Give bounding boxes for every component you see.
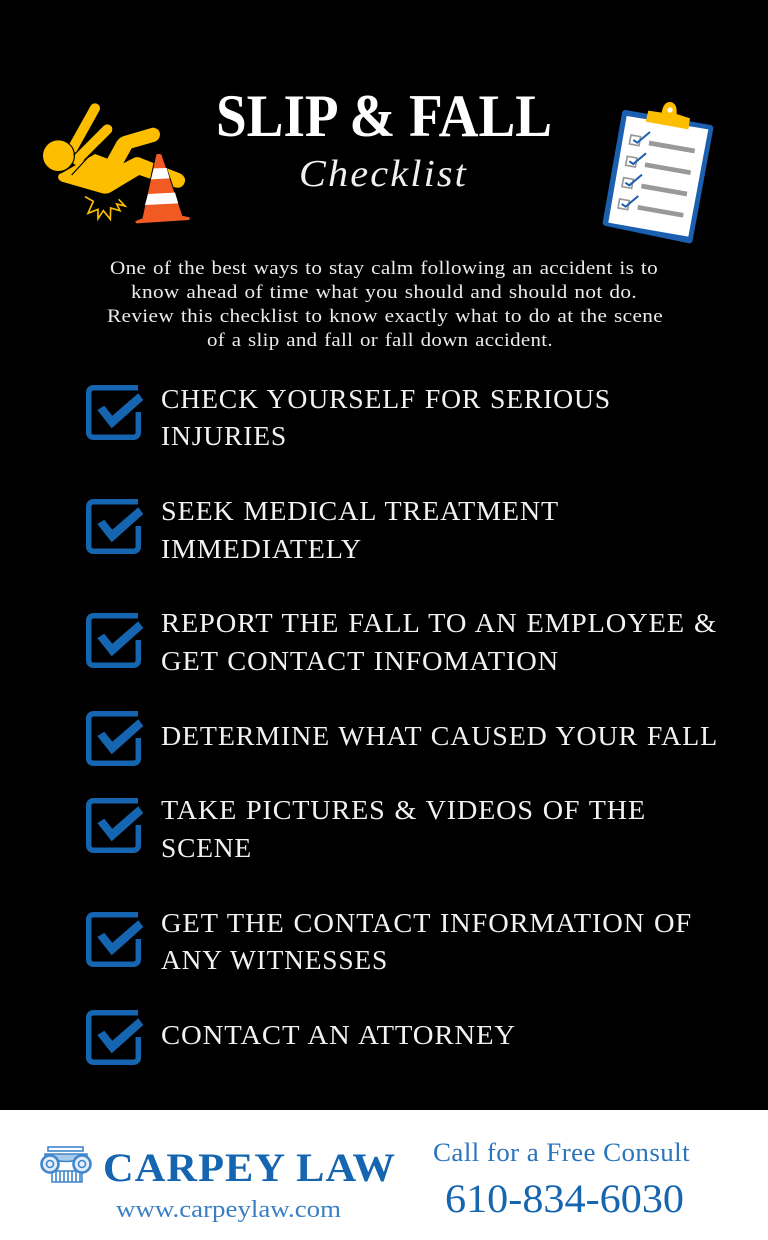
checklist item 3: GET CONTACT INFOMATION (161, 646, 559, 676)
checklist item 3: REPORT THE FALL TO AN EMPLOYEE & (161, 608, 717, 638)
website: www.carpeylaw.com (116, 1197, 341, 1223)
icon: checkbox 2 (89, 502, 143, 551)
checklist item 7 (89, 1013, 516, 1062)
call to action: Call for a Free Consult (433, 1138, 690, 1167)
icon: checkbox 6 (89, 915, 143, 964)
checklist item 1 (89, 384, 611, 451)
checklist item 2 (89, 496, 559, 564)
intro text: One of the best ways to stay calm following an accident is to (110, 258, 658, 279)
checklist item 4 (89, 714, 718, 763)
icon: checkbox 4 (89, 714, 143, 763)
icon: falling person and traffic cone (43, 108, 190, 223)
checklist item 5: TAKE PICTURES & VIDEOS OF THE (161, 795, 646, 825)
logo wordmark: CARPEY LAW (103, 1145, 396, 1190)
checklist item 6: GET THE CONTACT INFORMATION OF (161, 908, 692, 938)
icon: column capital logo (42, 1147, 90, 1182)
panel: footer (0, 1110, 768, 1240)
checklist item 1: CHECK YOURSELF FOR SERIOUS (161, 384, 611, 414)
icon: checkbox 5 (89, 801, 143, 850)
intro text: Review this checklist to know exactly what to do at the scene (107, 306, 663, 327)
icon: clipboard (606, 102, 710, 240)
checklist item 6 (89, 908, 692, 975)
intro text: know ahead of time what you should and should not do. (131, 282, 637, 303)
checklist item 5: SCENE (161, 833, 252, 863)
checklist item 2: IMMEDIATELY (161, 534, 362, 564)
checklist item 7: CONTACT AN ATTORNEY (161, 1020, 516, 1050)
intro text: of a slip and fall or fall down accident. (207, 330, 553, 351)
checklist item 5 (89, 795, 646, 863)
phone number: 610-834-6030 (445, 1176, 684, 1221)
icon: checkbox 7 (89, 1013, 143, 1062)
icon: checkbox 3 (89, 616, 143, 665)
checklist item 4: DETERMINE WHAT CAUSED YOUR FALL (161, 721, 718, 751)
icon: checkbox 1 (89, 388, 143, 437)
checklist item 2: SEEK MEDICAL TREATMENT (161, 496, 559, 526)
subtitle: Checklist (299, 153, 468, 195)
checklist item 6: ANY WITNESSES (161, 945, 388, 975)
intro text (107, 258, 663, 351)
checklist item 3 (89, 608, 717, 676)
title: SLIP & FALL (216, 83, 552, 149)
checklist item 1: INJURIES (161, 421, 287, 451)
